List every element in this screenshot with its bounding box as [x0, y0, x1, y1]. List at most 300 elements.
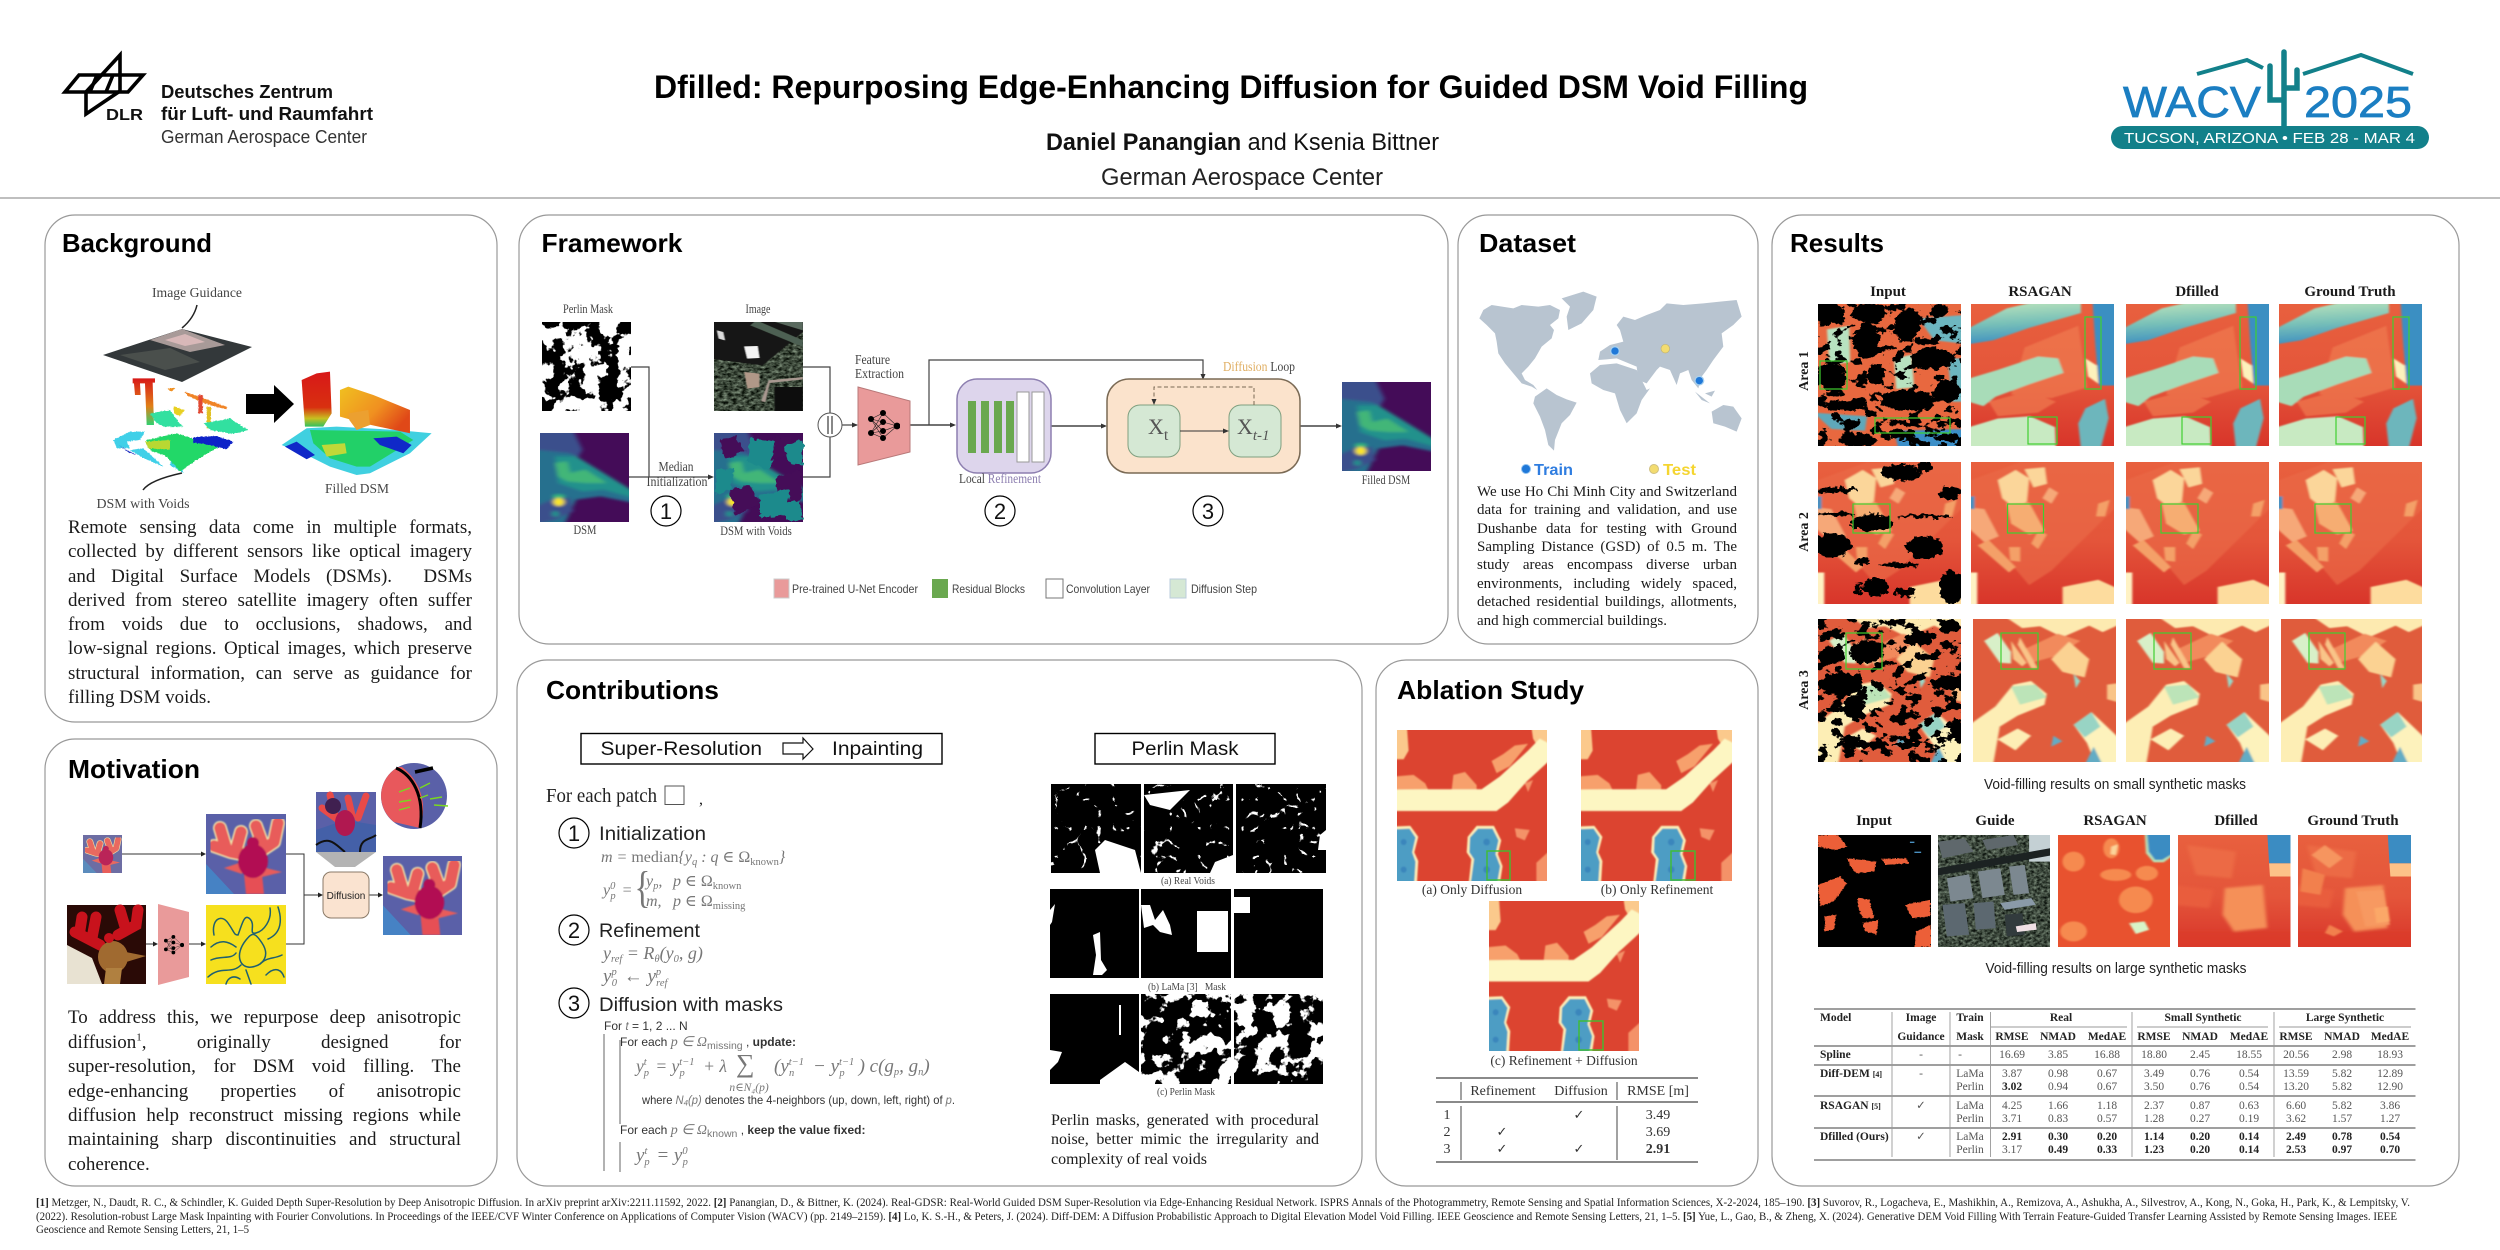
step 3: diffusion with masks: where N₄(p) denotes the 4-neighbors (up, down, left, right) of p. [641, 1093, 955, 1107]
table: quantitative results: 3.50 [2144, 1081, 2164, 1093]
step 1: initialization: q [692, 857, 697, 868]
connectors: median initialization [629, 360, 1340, 477]
step 3: diffusion with masks: y [636, 1056, 644, 1076]
step 3: diffusion with masks: t [644, 1057, 648, 1068]
text: background paragraph: from voids due to occlusions, shadows, and [68, 614, 472, 635]
step 1: initialization: 1 [568, 821, 580, 846]
logo: DLR German Aerospace Center: DLR [106, 107, 143, 124]
table: quantitative results: Perlin [1956, 1081, 1984, 1093]
caption: Real Voids: (a) Real Voids [1161, 875, 1215, 887]
column headers: large masks [1856, 813, 2399, 829]
label: Image: Image [746, 301, 771, 316]
table: quantitative results: 0.54 [2239, 1068, 2259, 1080]
step 3: diffusion with masks: − y [808, 1056, 840, 1077]
text: background paragraph: low-signal regions. Optical images, which preserve [68, 638, 472, 659]
step 3: diffusion with masks: update: [753, 1035, 796, 1049]
step 2: refinement: 0 [612, 978, 618, 989]
step 3: diffusion with masks: t−1 [839, 1057, 854, 1068]
table: ablation RMSE: 2 [1444, 1125, 1450, 1140]
step 2: refinement: 2 [568, 918, 580, 943]
table: ablation RMSE: Refinement [1470, 1084, 1536, 1099]
block: diffusion loop: t [1164, 427, 1169, 444]
affiliation: German Aerospace Center [1101, 164, 1383, 191]
column headers: large masks: Guide [1975, 813, 2015, 829]
table: quantitative results: Perlin [1956, 1113, 1984, 1125]
step 1: initialization: y [646, 873, 653, 890]
logo: DLR German Aerospace Center: Deutsches Zentrum [161, 81, 333, 102]
box: Perlin Mask [1095, 734, 1275, 764]
table: quantitative results: 3.02 [2002, 1081, 2022, 1093]
logo: DLR German Aerospace Center [65, 55, 373, 147]
text: dataset paragraph: Sampling Distance (GSD) of 0.5 m. The [1477, 539, 1737, 555]
legend [774, 579, 1257, 598]
heading: Contributions: Contributions [546, 675, 719, 705]
text: motivation paragraph: edge-enhancing properties of anisotropic [68, 1081, 461, 1102]
label: DSM with Voids: DSM with Voids [720, 523, 792, 538]
table: quantitative results: 1.66 [2048, 1100, 2068, 1112]
step 3: diffusion with masks: = y [652, 1145, 683, 1166]
figure: LaMa masks [1050, 889, 1323, 978]
block: diffusion loop: t-1 [1253, 428, 1270, 444]
step 3: diffusion with masks: p [838, 1068, 845, 1079]
text: For each patch: , [699, 791, 703, 808]
column headers: small masks: Input [1870, 284, 1906, 300]
text: motivation paragraph: maintaining sharp discontinuities and structural [68, 1129, 461, 1150]
table: quantitative results: - [1919, 1049, 1923, 1061]
text: dataset paragraph: detached residential buildings, allotments, [1477, 594, 1737, 610]
text: background paragraph: Remote sensing data come in multiple formats, [68, 517, 472, 538]
block: pre-trained encoder [858, 387, 910, 465]
table: quantitative results: Guidance [1897, 1031, 1945, 1043]
table: quantitative results: 0.67 [2097, 1081, 2117, 1093]
table: quantitative results: RMSE [2279, 1031, 2313, 1043]
table: quantitative results: 2.49 [2286, 1131, 2306, 1143]
box: Diffusion: Diffusion [327, 891, 365, 902]
chart: DSM with voids [113, 378, 248, 473]
text: motivation paragraph: coherence. [68, 1154, 150, 1175]
chart: filled DSM [282, 372, 432, 475]
label: Image Guidance: Image Guidance [152, 285, 242, 300]
text: background paragraph: collected by different sensors like optical imagery [68, 541, 472, 562]
image: DSM [535, 430, 634, 525]
heading: Ablation Study: Ablation Study [1397, 675, 1585, 705]
legend: Convolution Layer [1066, 582, 1150, 596]
box: Diffusion [323, 872, 369, 918]
image: refinement plus diffusion [1486, 898, 1642, 1053]
logo: WACV 2025: WACV [2123, 78, 2262, 127]
table: quantitative results: ✓ [1916, 1131, 1926, 1143]
step 3: diffusion with masks: p [682, 1157, 688, 1168]
figure: DSM void filling illustration [96, 285, 432, 511]
row: Area 3: Area 3 [1797, 670, 1812, 710]
table: quantitative results: 1.18 [2097, 1100, 2117, 1112]
text: background paragraph: derived from stereo satellite imagery often suffer [68, 590, 472, 611]
caption: only refinement: (b) Only Refinement [1601, 882, 1713, 897]
table: quantitative results: RMSE [2137, 1031, 2171, 1043]
table: ablation RMSE: 3.49 [1646, 1108, 1670, 1123]
step 3: diffusion with masks: n∈N₄(p) [729, 1082, 769, 1094]
step 3: diffusion with masks: t−1 [789, 1057, 804, 1068]
box: Super-Resolution to Inpainting: Inpainting [832, 739, 923, 760]
step 2: refinement: y [603, 943, 611, 963]
text: Perlin paragraph: complexity of real voids [1051, 1151, 1207, 1168]
table: quantitative results: 0.20 [2097, 1131, 2117, 1143]
step 3: diffusion with masks: known [707, 1128, 738, 1140]
step 1: initialization: 0 [610, 881, 616, 892]
table: quantitative results: Large Synthetic [2306, 1012, 2384, 1024]
block: diffusion loop [1107, 379, 1300, 473]
map: study locations [1479, 292, 1742, 451]
table: quantitative results: 18.80 [2141, 1049, 2167, 1061]
legend: Diffusion Step [1191, 582, 1257, 596]
table: quantitative results: 0.98 [2048, 1068, 2068, 1080]
table: ablation RMSE: 3 [1444, 1142, 1450, 1157]
step 1: initialization: } [779, 849, 786, 866]
table: quantitative results: 0.20 [2190, 1131, 2210, 1143]
table: quantitative results: Diff-DEM [4] [1820, 1068, 1882, 1080]
step 1: initialization: missing [713, 901, 746, 912]
image: output depth [383, 856, 462, 935]
table: ablation RMSE: Diffusion [1554, 1084, 1608, 1099]
step 2: refinement [559, 915, 703, 989]
legend: Test: Test [1663, 462, 1697, 479]
heading: Motivation: Motivation [68, 754, 200, 784]
image: guide photo [67, 905, 146, 984]
row: Area 1 [1797, 301, 2426, 449]
step 2: refinement: y [603, 966, 611, 987]
table: quantitative results: 5.82 [2332, 1100, 2352, 1112]
block: diffusion loop: X [1237, 414, 1253, 439]
table: quantitative results: MedAE [2088, 1031, 2126, 1043]
icon: feature encoder [158, 904, 189, 985]
panel: Motivation [45, 739, 497, 1186]
row: Area 2: Area 2 [1797, 512, 1812, 552]
image: only refinement [1578, 727, 1735, 883]
table: quantitative results: 2.37 [2144, 1100, 2164, 1112]
step marker 2 [985, 496, 1015, 526]
step 2: refinement: p [655, 967, 661, 978]
text: motivation paragraph: diffusion1, originally designed for [68, 1031, 461, 1053]
caption: only diffusion: (a) Only Diffusion [1422, 882, 1522, 897]
references: [1] Metzger, N., Daudt, R. C., & Schindler, K. Guided Depth Super-Resolution by Deep Anisotropic Diffusion. In arXiv preprint arXiv:2211.11592, 2022. [2] Panangian, D., & Bittner, K. (2024). Real-GDSR: Real-World Guided DSM Super-Resolution via Edge-Enhancing Residual Network. ISPRS Annals of the Photogrammetry, Remote Sensing and Spatial Information Sciences, X-2-2024, 185–190. [3] Suvorov, R., Logacheva, E., Mashikhin, A., Remizova, A., Ashukha, A., Silvestrov, A., Kong, N., Goka, H., Park, K., & Lempitsky, V. [36, 1197, 2410, 1209]
table: quantitative results: NMAD [2040, 1031, 2076, 1043]
table: quantitative results: 0.76 [2190, 1081, 2210, 1093]
column headers: large masks: Ground Truth [2307, 813, 2399, 829]
table: quantitative results: Real [2050, 1012, 2072, 1024]
step 3: diffusion with masks: ) [922, 1056, 930, 1077]
step 3: diffusion with masks: ) c(g [858, 1056, 894, 1077]
logo: WACV 2025: TUCSON, ARIZONA • FEB 28 - MAR 4 [2124, 130, 2415, 147]
box: Super-Resolution to Inpainting: Super-Resolution [600, 739, 762, 760]
table: quantitative results [1814, 1009, 2416, 1160]
step 3: diffusion with masks: , [743, 1035, 753, 1049]
table: quantitative results: 0.63 [2239, 1100, 2259, 1112]
text: dataset paragraph: study areas encompass diverse urban [1477, 557, 1737, 573]
table: quantitative results: RMSE [1995, 1031, 2029, 1043]
step 2: refinement: Refinement [599, 921, 701, 942]
table: quantitative results: Spline [1820, 1049, 1851, 1061]
step 3: diffusion with masks: , g [899, 1056, 918, 1077]
label: Feature Extraction: Extraction [855, 367, 904, 382]
table: quantitative results: 1.14 [2144, 1131, 2164, 1143]
table: quantitative results: MedAE [2371, 1031, 2409, 1043]
logo: WACV 2025: 2025 [2304, 78, 2412, 127]
table: quantitative results: 0.87 [2190, 1100, 2210, 1112]
table: quantitative results: 20.56 [2283, 1049, 2309, 1061]
step 1: initialization: = [618, 882, 632, 899]
table: quantitative results: Train [1956, 1012, 1984, 1024]
table: quantitative results: 3.86 [2380, 1100, 2400, 1112]
image: satellite guide [711, 320, 803, 413]
table: ablation RMSE: ✓ [1497, 1124, 1507, 1139]
image: upsampled depth [206, 814, 286, 894]
text: background paragraph: filling DSM voids. [68, 687, 211, 708]
step 2: refinement: ref [656, 978, 669, 989]
step 1: initialization: y [603, 882, 610, 899]
label: Diffusion Loop: Diffusion Loop [1223, 360, 1295, 375]
table: quantitative results: 0.78 [2332, 1131, 2352, 1143]
step 3: diffusion with masks: p [643, 1157, 650, 1168]
table: quantitative results: 0.57 [2097, 1113, 2117, 1125]
table: quantitative results: 5.82 [2332, 1081, 2352, 1093]
legend: Test [1650, 462, 1697, 479]
caption: small synthetic masks: Void-filling results on small synthetic masks [1984, 777, 2246, 793]
caption: large synthetic masks: Void-filling results on large synthetic masks [1986, 961, 2246, 977]
table: quantitative results: 0.27 [2190, 1113, 2210, 1125]
panel: Ablation Study [1376, 660, 1758, 1186]
step 3: diffusion with masks [559, 988, 955, 1172]
step 3: diffusion with masks: For t = 1, 2 ... N [604, 1019, 688, 1033]
step 1: initialization: known [713, 881, 742, 892]
step 3: diffusion with masks: , [737, 1123, 747, 1137]
table: quantitative results: 16.88 [2094, 1049, 2120, 1061]
step 1: initialization: Ω [701, 873, 713, 890]
table: quantitative results: MedAE [2230, 1031, 2268, 1043]
step 3: diffusion with masks: n [789, 1068, 794, 1079]
table: ablation RMSE: RMSE [m] [1627, 1084, 1689, 1099]
step marker 2: 2 [994, 499, 1006, 524]
text: dataset paragraph: We use Ho Chi Minh City and Switzerland [1477, 484, 1737, 500]
step 2: refinement: 0 [674, 954, 680, 965]
text: Perlin paragraph: noise, better mimic the irregularity and [1051, 1131, 1319, 1148]
text: Perlin paragraph [1051, 1111, 1319, 1175]
table: quantitative results: NMAD [2182, 1031, 2218, 1043]
table: quantitative results: 12.90 [2377, 1081, 2403, 1093]
caption: LaMa Mask: (b) LaMa [3] Mask [1148, 981, 1226, 993]
table: quantitative results: 2.91 [2002, 1131, 2022, 1143]
step 3: diffusion with masks: p [679, 1068, 685, 1079]
step 3: diffusion with masks: missing [707, 1040, 743, 1052]
step marker 3 [1193, 496, 1223, 526]
image: Perlin mask [542, 322, 631, 411]
image: low-resolution depth [83, 835, 122, 873]
table: quantitative results: 0.76 [2190, 1068, 2210, 1080]
block: local refinement [957, 379, 1051, 473]
table: quantitative results: 0.54 [2239, 1081, 2259, 1093]
step 2: refinement: ← y [619, 966, 656, 987]
table: quantitative results: 12.89 [2377, 1068, 2403, 1080]
table: quantitative results: 3.71 [2002, 1113, 2022, 1125]
block: diffusion loop: X [1148, 414, 1164, 439]
table: quantitative results: 0.67 [2097, 1068, 2117, 1080]
text: dataset paragraph: environments, including widely spaced, [1477, 576, 1737, 592]
step 3: diffusion with masks: 0 [682, 1146, 688, 1157]
heading: Background: Background [62, 228, 212, 258]
step 3: diffusion with masks: = y [651, 1056, 680, 1076]
table: quantitative results: - [1958, 1049, 1962, 1061]
step 3: diffusion with masks: Diffusion with masks [599, 995, 783, 1016]
table: ablation RMSE: ✓ [1574, 1141, 1584, 1156]
text: dataset paragraph: data for training and validation, and use [1477, 502, 1737, 518]
heading: Dataset: Dataset [1479, 228, 1576, 258]
table: quantitative results: Dfilled (Ours) [1820, 1131, 1889, 1143]
step 1: initialization: p ∈ [672, 873, 701, 890]
text: background paragraph: and Digital Surface Models (DSMs). DSMs [68, 566, 472, 587]
step 1: initialization: known [750, 857, 780, 868]
text: dataset paragraph: and high commercial buildings. [1477, 613, 1667, 629]
label: Median Initialization [646, 460, 708, 490]
text: motivation paragraph: diffusion help reconstruct missing regions while [68, 1105, 461, 1126]
step 2: refinement: ref [611, 954, 624, 965]
step marker 1 [651, 496, 681, 526]
column headers: small masks: RSAGAN [2008, 284, 2072, 300]
panel: Framework [519, 215, 1448, 644]
table: quantitative results: Small Synthetic [2164, 1012, 2242, 1024]
legend: Train: Train [1534, 462, 1573, 479]
label: DSM: DSM [574, 522, 597, 537]
table: quantitative results: 2.53 [2286, 1144, 2306, 1156]
table: ablation RMSE: 2.91 [1646, 1142, 1670, 1157]
step 3: diffusion with masks: + λ [699, 1056, 727, 1076]
step 3: diffusion with masks: For each p ∈ Ω [620, 1035, 707, 1050]
heading: Framework: Framework [542, 228, 683, 258]
text: Perlin paragraph: Perlin masks, generated with procedural [1051, 1112, 1319, 1129]
column headers: large masks: RSAGAN [2083, 813, 2147, 829]
references [36, 1197, 2410, 1236]
table: quantitative results: 16.69 [1999, 1049, 2025, 1061]
step 3: diffusion with masks: p [893, 1067, 899, 1078]
table: quantitative results: 18.55 [2236, 1049, 2262, 1061]
arrowheads [708, 374, 1342, 480]
step 2: refinement: p [610, 967, 617, 978]
image: DSM with voids [709, 430, 808, 525]
table: quantitative results: 0.14 [2239, 1131, 2259, 1143]
logo: WACV 2025 [2111, 52, 2429, 149]
table: quantitative results: 2.45 [2190, 1049, 2210, 1061]
arrow to DSM with voids [143, 473, 182, 490]
step 1: initialization: Ω [701, 893, 713, 910]
panel: Results [1772, 215, 2459, 1186]
column headers: small masks: Dfilled [2175, 284, 2219, 300]
caption: refinement plus diffusion: (c) Refinement + Diffusion [1490, 1053, 1638, 1068]
step 3: diffusion with masks: For each p ∈ Ω [620, 1123, 707, 1138]
step 2: refinement: = R [622, 943, 654, 963]
heading: Results: Results [1790, 228, 1884, 258]
column headers: small masks: Ground Truth [2304, 284, 2396, 300]
step 1: initialization: m, [646, 893, 662, 910]
table: quantitative results: 1.28 [2144, 1113, 2164, 1125]
table: ablation RMSE: ✓ [1497, 1141, 1507, 1156]
step 3: diffusion with masks: n [918, 1067, 923, 1078]
label: Feature Extraction: Feature [855, 353, 890, 368]
table: quantitative results: LaMa [1956, 1131, 1984, 1143]
authors: Daniel Panangian and Ksenia Bittner [1046, 129, 1439, 156]
step 1: initialization: { [635, 864, 650, 912]
row: Area 3 [1797, 616, 2426, 765]
table: quantitative results: 0.54 [2380, 1131, 2400, 1143]
column headers: large masks: Input [1856, 813, 1892, 829]
table: quantitative results: RSAGAN [5] [1820, 1100, 1881, 1112]
label: DSM with Voids: DSM with Voids [96, 496, 190, 511]
label: Local Refinement: Local Refinement [959, 472, 1041, 487]
step 2: refinement: , g) [679, 943, 703, 964]
caption: Perlin Mask: (c) Perlin Mask [1157, 1086, 1215, 1098]
image: filled DSM [1337, 379, 1436, 474]
table: quantitative results: 3.87 [2002, 1068, 2022, 1080]
table: quantitative results: 0.19 [2239, 1113, 2259, 1125]
table: ablation RMSE: 3.69 [1646, 1125, 1670, 1140]
table: quantitative results: ✓ [1916, 1100, 1926, 1112]
figure: Perlin masks [1050, 994, 1323, 1084]
table: quantitative results: LaMa [1956, 1068, 1984, 1080]
table: quantitative results: 2.98 [2332, 1049, 2352, 1061]
row: Area 2 [1797, 462, 2426, 607]
images: large mask comparison [1818, 832, 2415, 950]
table: quantitative results: 13.20 [2283, 1081, 2309, 1093]
label: Feature Extraction [855, 353, 904, 382]
table: quantitative results: 3.17 [2002, 1144, 2022, 1156]
step 3: diffusion with masks: keep the value fixed: [747, 1123, 865, 1137]
arrow: void filling [246, 385, 294, 423]
image: guidance plane [103, 329, 252, 382]
step 1: initialization: p [609, 891, 616, 902]
label: Filled DSM: Filled DSM [1362, 472, 1411, 487]
table: ablation RMSE: 1 [1444, 1108, 1450, 1123]
table: quantitative results: 6.60 [2286, 1100, 2306, 1112]
step 1: initialization: Initialization [599, 824, 706, 845]
text: For each patch: For each patch [546, 785, 657, 807]
table: quantitative results: Model [1820, 1012, 1851, 1024]
table: quantitative results: LaMa [1956, 1100, 1984, 1112]
step 3: diffusion with masks: t−1 [679, 1057, 695, 1068]
step 2: refinement: (y [660, 943, 674, 964]
text: background paragraph: structural information, can serve as guidance for [68, 663, 472, 684]
label: Perlin Mask: Perlin Mask [563, 301, 613, 316]
table: quantitative results: 0.97 [2332, 1144, 2352, 1156]
box: Perlin Mask: Perlin Mask [1132, 739, 1239, 760]
table: quantitative results: 4.25 [2002, 1100, 2022, 1112]
table: ablation RMSE [1436, 1078, 1698, 1162]
step 1: initialization: : q ∈ [697, 849, 738, 866]
text: dataset paragraph: Dushanbe data for testing with Ground [1477, 520, 1737, 536]
step 1: initialization: , [658, 873, 662, 890]
panel: Background [45, 215, 497, 722]
step 3: diffusion with masks: (y [774, 1056, 789, 1077]
row: Area 1: Area 1 [1797, 351, 1812, 391]
step 3: diffusion with masks: y [636, 1145, 644, 1166]
text: background paragraph [68, 516, 472, 716]
references: Geoscience and Remote Sensing Letters, 21, 1–5 [36, 1224, 249, 1236]
icon: zoom circle with arrows [381, 763, 448, 829]
step 3: diffusion with masks: ∑ [736, 1049, 755, 1078]
table: quantitative results: 0.70 [2380, 1144, 2400, 1156]
table: ablation RMSE: ✓ [1574, 1107, 1584, 1122]
step 1: initialization: Ω [738, 849, 750, 866]
icon: concatenation [818, 413, 842, 437]
arrow to image guidance [182, 305, 197, 328]
table: quantitative results: NMAD [2324, 1031, 2360, 1043]
diagram: guided super-resolution [67, 763, 462, 985]
